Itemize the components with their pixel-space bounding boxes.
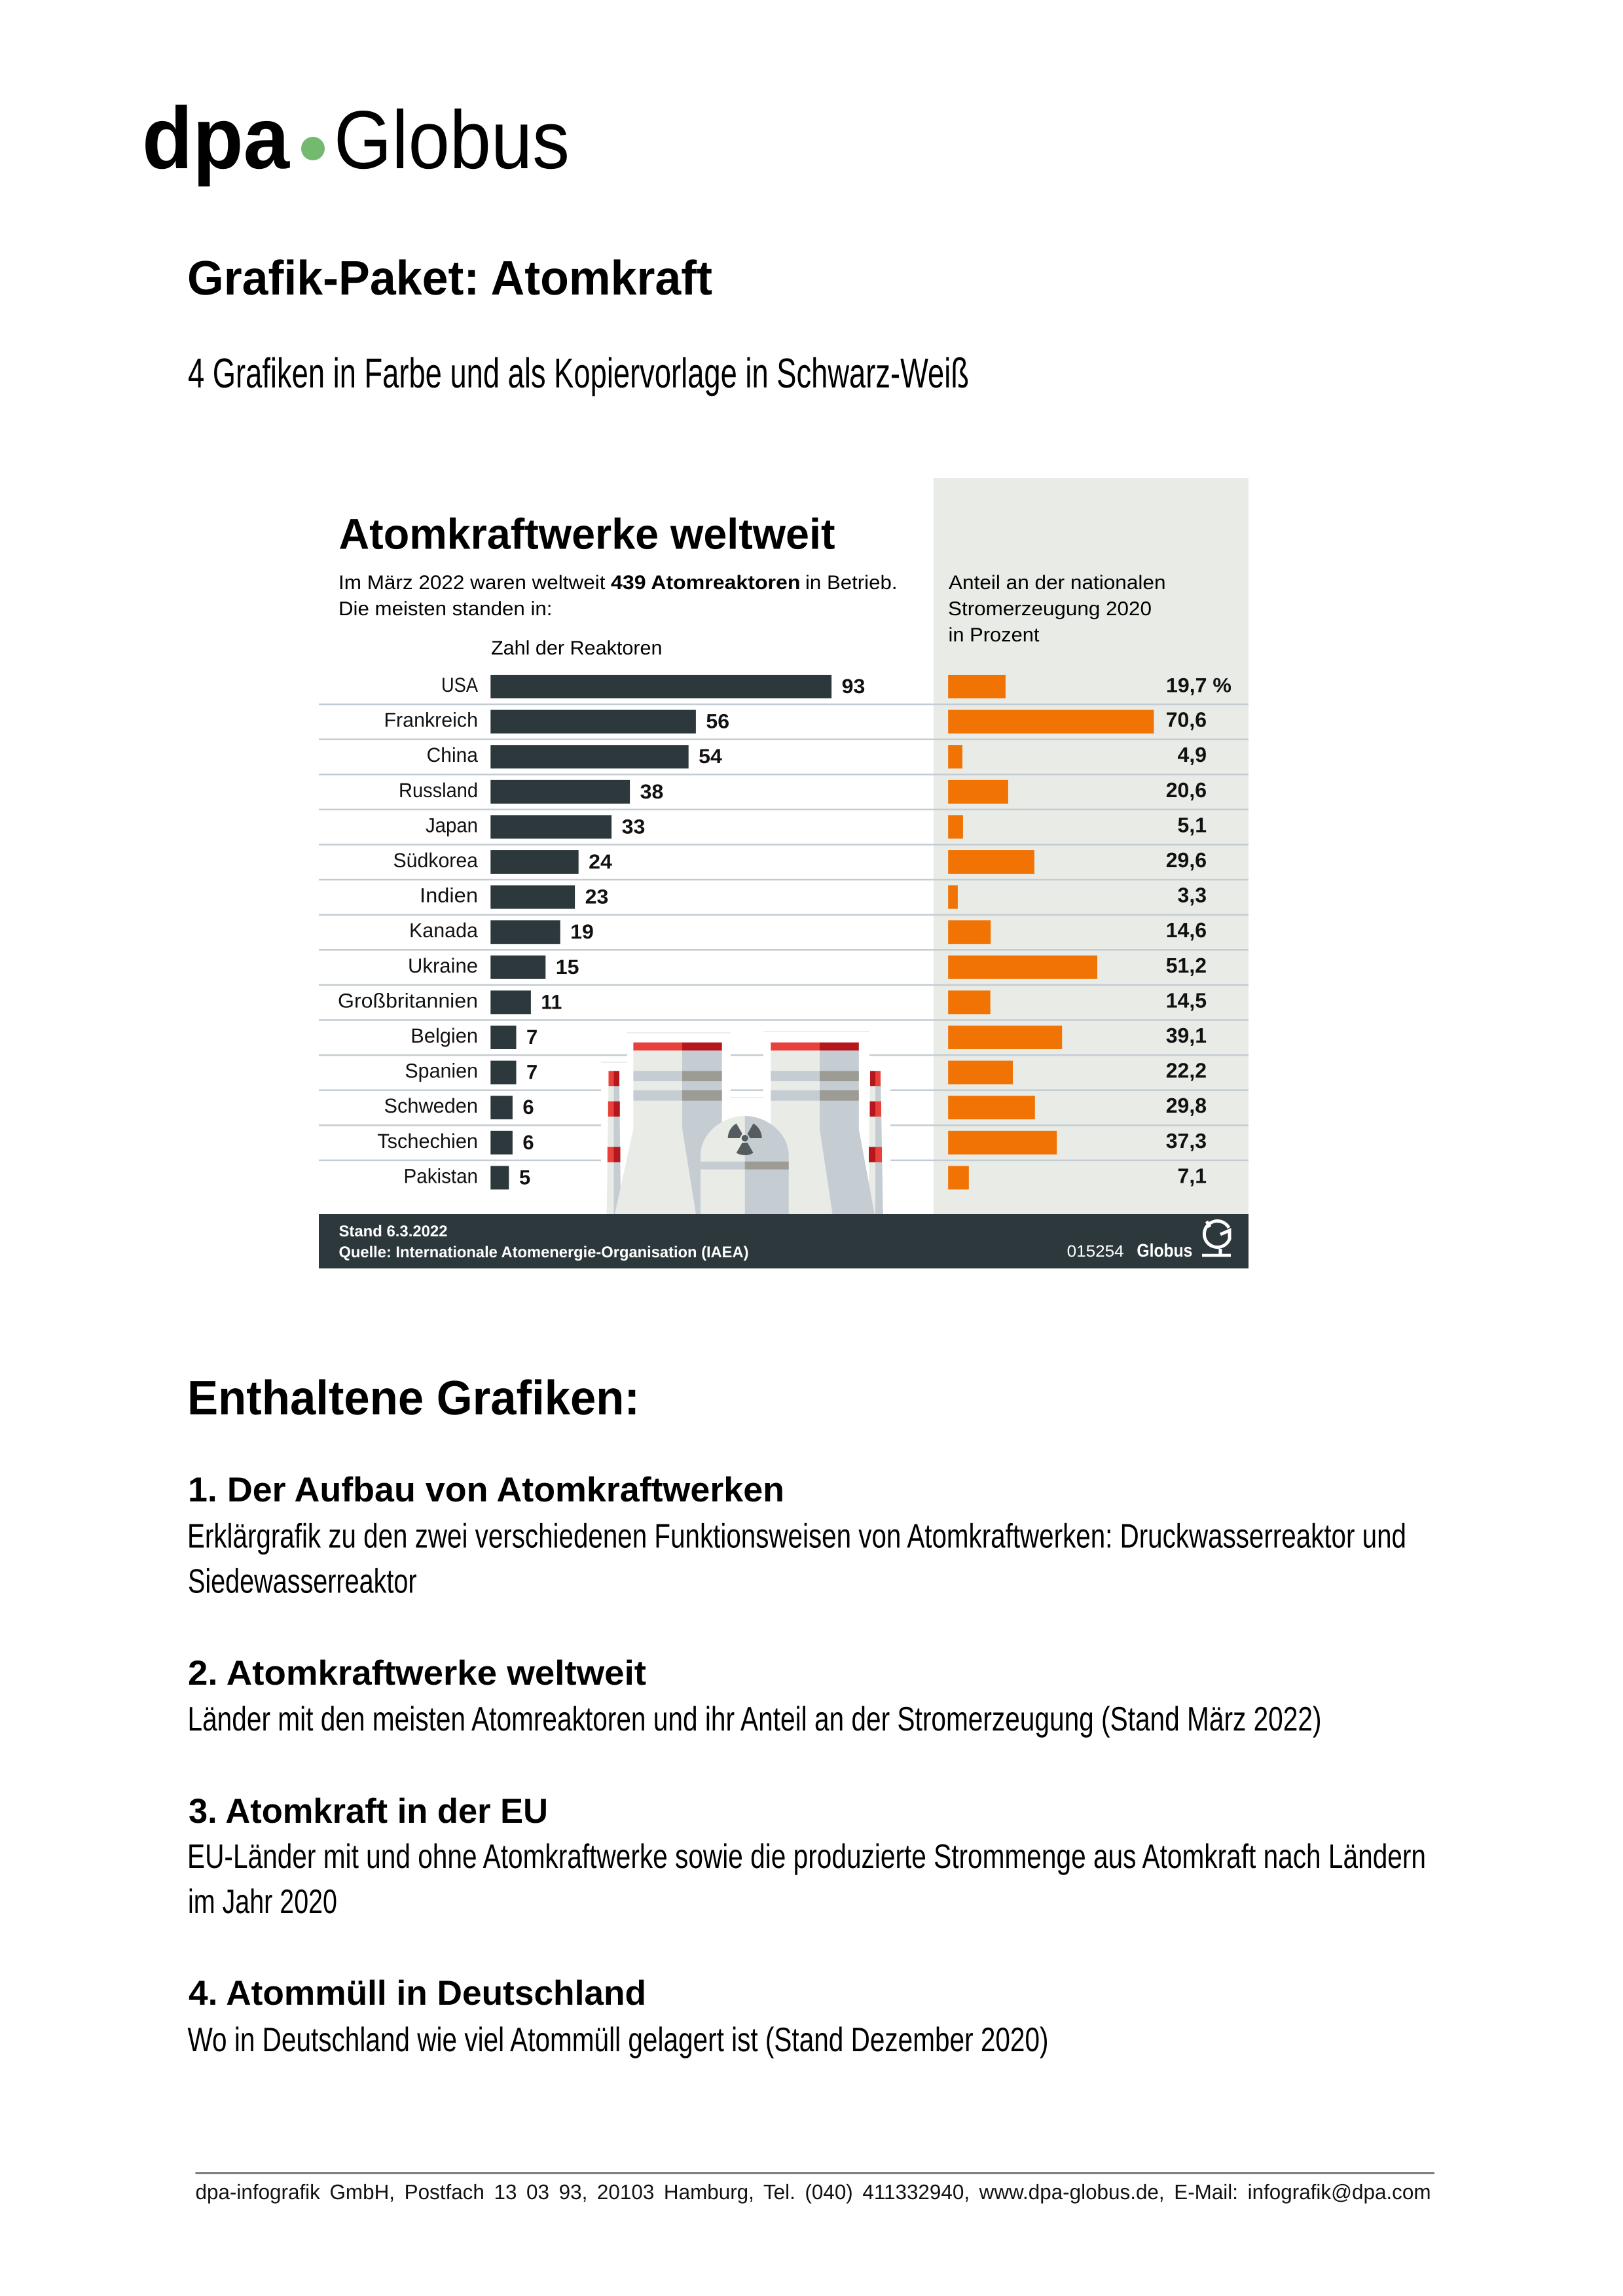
row: China: 54 bbox=[699, 745, 723, 768]
row: Großbritannien bbox=[338, 989, 562, 1014]
share: Frankreich: 70,6 bbox=[1166, 708, 1207, 732]
share: Pakistan: 7,1 bbox=[1178, 1164, 1207, 1187]
row: Großbritannien: Großbritannien bbox=[338, 989, 478, 1012]
chart footer bar: Stand 6.3.2022 bbox=[339, 1223, 448, 1240]
share: Ukraine bbox=[948, 954, 1207, 979]
item 4: 4. Atommüll in Deutschland bbox=[189, 1974, 646, 2013]
share: Tschechien: 37,3 bbox=[1166, 1129, 1207, 1153]
share: China bbox=[948, 743, 1207, 768]
row: China bbox=[427, 744, 723, 768]
row: Schweden: 6 bbox=[522, 1096, 534, 1119]
chart intro text: in Betrieb. bbox=[805, 572, 897, 594]
row: Russland: Russland bbox=[399, 779, 478, 802]
left column heading: Zahl der Reaktoren bbox=[491, 637, 663, 659]
icon: Globus logo bbox=[1202, 1221, 1231, 1255]
share: Kanada bbox=[948, 918, 1207, 944]
right column heading: Stromerzeugung 2020 bbox=[948, 598, 1152, 620]
right column heading: in Prozent bbox=[948, 624, 1040, 646]
title: Grafik-Paket: Atomkraft bbox=[187, 251, 712, 305]
row: Pakistan: 5 bbox=[519, 1166, 530, 1189]
row: Frankreich bbox=[384, 709, 729, 734]
logo: dpa Globus: dpa bbox=[142, 90, 290, 187]
share: China: 4,9 bbox=[1178, 743, 1207, 766]
row: Südkorea: 24 bbox=[589, 850, 613, 873]
row: Belgien: 7 bbox=[526, 1026, 538, 1049]
bar chart: Anteil an der Stromerzeugung bbox=[948, 674, 1231, 1189]
row: USA: USA bbox=[441, 673, 478, 696]
share: Indien bbox=[948, 884, 1207, 909]
share: Spanien bbox=[948, 1059, 1207, 1085]
share: Russland bbox=[948, 778, 1207, 804]
row: Pakistan bbox=[403, 1164, 530, 1189]
share: Großbritannien bbox=[948, 988, 1207, 1014]
share: Japan bbox=[948, 813, 1207, 838]
item 3 bbox=[187, 1792, 1426, 1921]
left chimney bbox=[607, 1071, 621, 1215]
row: Südkorea: Südkorea bbox=[393, 849, 479, 872]
row: Russland: 38 bbox=[640, 780, 663, 803]
illustration: nuclear power plant bbox=[601, 1031, 890, 1215]
chart intro text: 439 Atomreaktoren bbox=[611, 572, 800, 594]
row: Kanada: Kanada bbox=[409, 919, 479, 942]
share: Ukraine: 51,2 bbox=[1166, 954, 1207, 977]
right column heading: Anteil an der nationalen bbox=[949, 572, 1165, 594]
chart footer bar bbox=[319, 1214, 1249, 1268]
chart intro text bbox=[338, 572, 897, 620]
item 2 bbox=[187, 1654, 1321, 1738]
share: Japan: 5,1 bbox=[1178, 813, 1207, 836]
row: Indien bbox=[420, 884, 608, 909]
share: Kanada: 14,6 bbox=[1166, 918, 1207, 942]
row: USA: 93 bbox=[842, 675, 865, 698]
right cooling tower bbox=[771, 1043, 875, 1215]
row: Kanada bbox=[409, 919, 594, 944]
row: Südkorea bbox=[393, 849, 613, 874]
row: Japan: Japan bbox=[426, 814, 478, 836]
row: Frankreich: 56 bbox=[706, 710, 729, 733]
row: Indien: Indien bbox=[420, 884, 478, 907]
share: USA bbox=[948, 674, 1231, 698]
item 1 bbox=[187, 1471, 1406, 1601]
row: Frankreich: Frankreich bbox=[384, 709, 478, 732]
row: Japan bbox=[426, 814, 645, 838]
row: Schweden bbox=[384, 1094, 534, 1119]
item 1: Siedewasserreaktor bbox=[188, 1563, 416, 1601]
item 3: im Jahr 2020 bbox=[188, 1883, 337, 1921]
icon: radiation symbol bbox=[728, 1123, 762, 1155]
logo: dpa Globus: Globus bbox=[334, 94, 570, 186]
share: Belgien: 39,1 bbox=[1166, 1024, 1207, 1047]
share: Südkorea: 29,6 bbox=[1166, 848, 1207, 872]
left cooling tower bbox=[615, 1043, 722, 1215]
item 2: 2. Atomkraftwerke weltweit bbox=[188, 1654, 646, 1693]
row: Ukraine bbox=[408, 954, 579, 979]
row: Tschechien bbox=[377, 1130, 534, 1155]
row: Großbritannien: 11 bbox=[541, 990, 562, 1013]
share: Schweden bbox=[948, 1094, 1207, 1119]
share: Schweden: 29,8 bbox=[1166, 1094, 1207, 1117]
row: Tschechien: Tschechien bbox=[377, 1130, 478, 1153]
footer contact line: dpa-infografik GmbH, Postfach 13 03 93, 20103 Hamburg, Tel. (040) 411332940, www.dpa-globus.de, E-Mail: infografik@dpa.com bbox=[195, 2180, 1431, 2204]
item 3: 3. Atomkraft in der EU bbox=[189, 1792, 548, 1831]
row: Ukraine: 15 bbox=[556, 956, 579, 978]
chart footer bar: Globus bbox=[1137, 1240, 1192, 1261]
row: Kanada: 19 bbox=[570, 920, 594, 943]
chart footer bar: 015254 bbox=[1067, 1242, 1124, 1261]
item 4: Wo in Deutschland wie viel Atommüll gelagert ist (Stand Dezember 2020) bbox=[187, 2021, 1049, 2059]
row: Schweden: Schweden bbox=[384, 1094, 478, 1117]
row: China: China bbox=[427, 744, 479, 766]
share: Pakistan bbox=[948, 1164, 1207, 1189]
item 4 bbox=[187, 1974, 1049, 2059]
row: Russland bbox=[399, 779, 663, 804]
row: Japan: 33 bbox=[622, 815, 645, 838]
bar chart: Zahl der Reaktoren bbox=[338, 673, 865, 1189]
chart intro text: Die meisten standen in: bbox=[338, 598, 553, 620]
right column heading bbox=[948, 572, 1165, 646]
item 1: 1. Der Aufbau von Atomkraftwerken bbox=[188, 1471, 784, 1509]
row: Spanien bbox=[405, 1060, 538, 1085]
share: Tschechien bbox=[948, 1129, 1207, 1155]
item 2: Länder mit den meisten Atomreaktoren und ihr Anteil an der Stromerzeugung (Stand März 2022) bbox=[187, 1700, 1321, 1738]
chart title: Atomkraftwerke weltweit bbox=[339, 509, 835, 558]
share: Frankreich bbox=[948, 708, 1207, 734]
right chimney bbox=[868, 1071, 883, 1215]
share: Großbritannien: 14,5 bbox=[1166, 988, 1207, 1012]
share: Belgien bbox=[948, 1024, 1207, 1049]
row: Belgien bbox=[410, 1024, 538, 1049]
panel: chart Atomkraftwerke weltweit bbox=[319, 478, 1249, 1268]
logo: dpa Globus bbox=[142, 90, 570, 187]
share: Südkorea bbox=[948, 848, 1207, 874]
row: Ukraine: Ukraine bbox=[408, 954, 478, 977]
share: Russland: 20,6 bbox=[1166, 778, 1207, 802]
row: Pakistan: Pakistan bbox=[403, 1164, 478, 1187]
row: USA bbox=[441, 673, 865, 698]
row: Tschechien: 6 bbox=[522, 1131, 534, 1154]
chart footer bar: Quelle: Internationale Atomenergie-Organisation (IAEA) bbox=[339, 1244, 749, 1261]
row: Belgien: Belgien bbox=[410, 1024, 478, 1047]
row: Spanien: 7 bbox=[526, 1061, 538, 1084]
share: USA: 19,7 % bbox=[1166, 674, 1231, 696]
share: Indien: 3,3 bbox=[1178, 884, 1207, 907]
row: Spanien: Spanien bbox=[405, 1060, 478, 1083]
share: Spanien: 22,2 bbox=[1166, 1059, 1207, 1083]
row: Indien: 23 bbox=[585, 886, 608, 908]
reactor dome bbox=[701, 1116, 789, 1215]
heading: Enthaltene Grafiken: Enthaltene Grafiken: bbox=[187, 1371, 640, 1425]
subtitle: 4 Grafiken in Farbe und als Kopiervorlage in Schwarz-Weiß bbox=[188, 350, 969, 397]
chart intro text: Im März 2022 waren weltweit bbox=[338, 572, 606, 594]
